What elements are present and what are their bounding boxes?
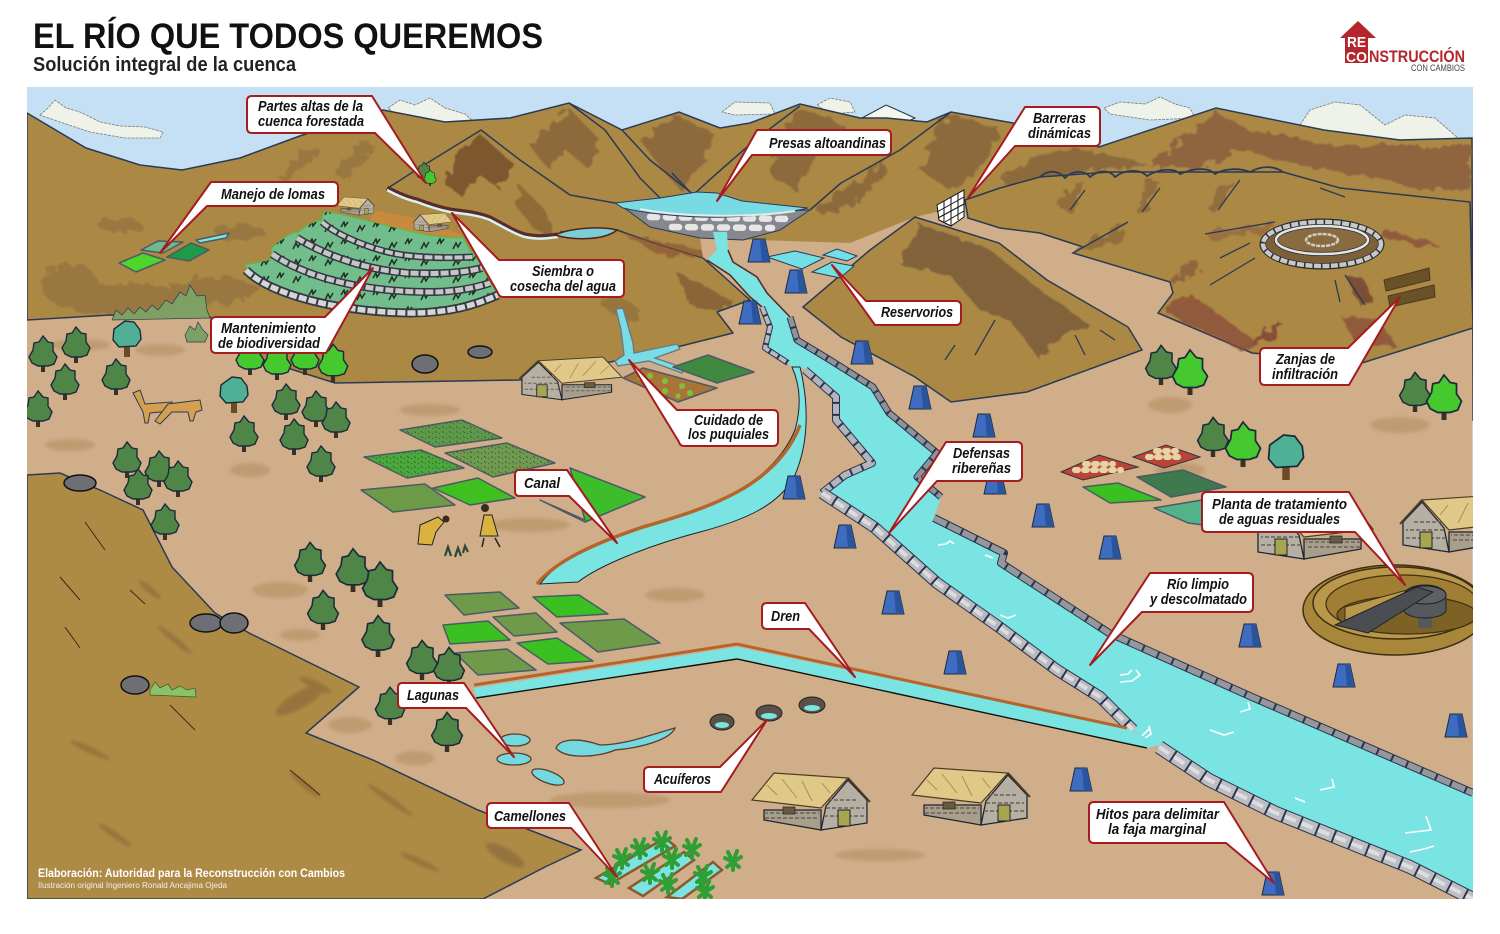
puquial spring and small plots: [615, 308, 754, 402]
terrace: orange platform: [370, 210, 464, 238]
treatment plant: [1303, 565, 1487, 655]
camellones raised fields: [596, 832, 741, 900]
callout: Cuidado de los puquiales: [629, 360, 778, 446]
back mountain range: [27, 103, 1473, 420]
callout: Zanjas de infiltración: infiltración: [1272, 366, 1338, 383]
trees: [24, 321, 1462, 752]
logo: Reconstrucción con Cambios: RE: [1347, 34, 1366, 51]
left foreground hill: [27, 473, 581, 899]
callout: Defensas ribereñas: Defensas: [953, 445, 1010, 462]
hill peak shading: [445, 135, 733, 325]
callout: Lagunas: Lagunas: [407, 687, 459, 704]
boundary markers (hitos): [739, 239, 1467, 895]
callout: Presas altoandinas: [717, 130, 891, 201]
lomas fields: [119, 233, 229, 272]
central hill: [803, 217, 1142, 402]
callout: Mantenimiento de biodiversidad: de biodiversidad: [218, 335, 321, 352]
callout: Partes altas de la cuenca forestada: cuenca forestada: [258, 113, 364, 130]
callout: Planta de tratamiento de aguas residuales: Planta de tratamiento: [1212, 496, 1347, 513]
callout: Partes altas de la cuenca forestada: Partes altas de la: [258, 98, 363, 115]
callout: Canal: Canal: [524, 475, 561, 492]
lagoons: [497, 728, 675, 788]
hill with peak: [389, 102, 952, 259]
llamas: [133, 390, 202, 424]
reservoirs: [767, 249, 857, 278]
stone terraces: [245, 210, 498, 313]
callout: Camellones: Camellones: [494, 808, 566, 825]
callout: Defensas ribereñas: [889, 442, 1022, 533]
callout: Zanjas de infiltración: [1260, 297, 1400, 385]
callout: Río limpio y descolmatado: y descolmatado: [1149, 591, 1247, 608]
callout: Reservorios: Reservorios: [881, 304, 953, 321]
callout: Canal: [515, 470, 617, 543]
houses: [337, 197, 1500, 830]
callout: Río limpio y descolmatado: Río limpio: [1167, 576, 1229, 593]
callout: Siembra o cosecha del agua: [452, 213, 624, 297]
terrace: third tier: [297, 220, 482, 273]
callout: Acuíferos: [644, 720, 767, 792]
snow peak: [862, 104, 916, 120]
grass shrubs: [112, 285, 210, 342]
canal: [537, 367, 806, 584]
aquifer wells: [710, 697, 825, 730]
ground edge line: [27, 258, 750, 383]
callout: Siembra o cosecha del agua: cosecha del agua: [510, 278, 616, 295]
callout: Barreras dinámicas: dinámicas: [1028, 125, 1091, 142]
callout: Hitos para delimitar la faja marginal: la faja marginal: [1108, 821, 1207, 838]
clouds: [40, 97, 1458, 142]
callout: Barreras dinámicas: [968, 107, 1100, 198]
field texture: [364, 420, 555, 478]
ground plain: [27, 205, 1473, 899]
callout: Dren: Dren: [771, 608, 800, 625]
callout: Cuidado de los puquiales: Cuidado de: [694, 412, 763, 429]
potato plots: [1061, 445, 1200, 480]
callout: Río limpio y descolmatado: [1090, 573, 1253, 665]
callout: Planta de tratamiento de aguas residuales: de aguas residuales: [1219, 511, 1340, 528]
callout: Mantenimiento de biodiversidad: Mantenimiento: [221, 320, 316, 337]
callout: Manejo de lomas: [160, 182, 338, 253]
left mountain mottling: [42, 140, 375, 316]
logo: Reconstrucción con Cambios: NSTRUCCIÓN: [1369, 47, 1465, 66]
callout: Presas altoandinas: Presas altoandinas: [769, 135, 886, 152]
forested highland trees: [416, 162, 436, 186]
grass patch near rock: [150, 682, 196, 697]
dynamic barrier grid: [937, 190, 964, 226]
callout: Acuíferos: Acuíferos: [653, 771, 711, 788]
dam: presa altoandina: [615, 192, 810, 240]
river ripples: [938, 541, 1434, 852]
drain: [474, 644, 1159, 748]
callout: Camellones: [487, 803, 617, 877]
terrace: second tier: [272, 232, 490, 292]
river: [707, 232, 1473, 899]
crop fields: [361, 420, 1226, 675]
footer credit: Elaboración: Autoridad para la Reconstrucción con Cambios: [38, 866, 345, 880]
footer credit: [38, 866, 345, 890]
callout: Barreras dinámicas: Barreras: [1033, 110, 1086, 127]
callout: Planta de tratamiento de aguas residuales: [1202, 492, 1405, 585]
ground dry patches: [45, 339, 1430, 861]
title: EL RÍO QUE TODOS QUEREMOS: [33, 16, 543, 56]
footer credit: Ilustración original Ingeniero Ronald Ancajima Ojeda: [38, 881, 228, 890]
callout: Partes altas de la cuenca forestada: [247, 96, 426, 183]
sky: [27, 87, 1473, 788]
callout: Manejo de lomas: Manejo de lomas: [221, 186, 325, 203]
subtitle: Solución integral de la cuenca: [33, 54, 297, 76]
logo: Reconstrucción con Cambios: [1340, 21, 1465, 73]
water harvesting channel and pond: [387, 188, 617, 239]
infiltration trenches: [1384, 268, 1435, 307]
callout: Hitos para delimitar la faja marginal: [1089, 802, 1274, 883]
rocks: [64, 346, 492, 694]
callout: Hitos para delimitar la faja marginal: Hitos para delimitar: [1096, 806, 1220, 823]
people sowing: [418, 504, 500, 557]
callout: Zanjas de infiltración: Zanjas de: [1275, 351, 1335, 368]
callout: Reservorios: [832, 265, 961, 325]
back mountain shading: [530, 108, 1470, 215]
callout: Dren: [762, 603, 855, 677]
callout: Mantenimiento de biodiversidad: [211, 268, 373, 353]
upper river banks: [707, 250, 790, 317]
logo: Reconstrucción con Cambios: CO: [1346, 49, 1367, 66]
callout: Lagunas: [398, 683, 514, 757]
callout: Cuidado de los puquiales: los puquiales: [688, 426, 769, 443]
terrace: bottom tier: [245, 258, 498, 310]
terrace: top tier: [322, 212, 473, 257]
logo: Reconstrucción con Cambios: CON CAMBIOS: [1411, 63, 1465, 73]
stone ring (infiltration terrace): [1260, 219, 1384, 269]
river stone defences: [762, 307, 1473, 899]
right hill: [965, 167, 1473, 363]
callout: Defensas ribereñas: ribereñas: [952, 460, 1011, 477]
callout: Siembra o cosecha del agua: Siembra o: [532, 263, 594, 280]
